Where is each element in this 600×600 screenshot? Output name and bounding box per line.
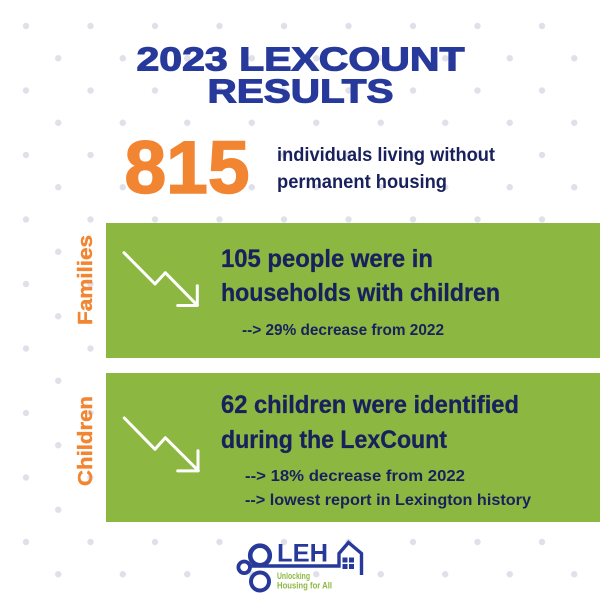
logo tagline: Unlocking <box>277 571 310 581</box>
icon: downward trend arrow <box>124 418 198 471</box>
logo tagline <box>277 571 332 591</box>
summary text: individuals living without <box>277 145 496 166</box>
children heading: during the LexCount <box>221 427 447 454</box>
title <box>136 40 464 110</box>
logo tagline: Housing for All <box>277 581 332 591</box>
children side label: Children <box>75 396 97 486</box>
families change note: --> 29% decrease from 2022 <box>242 322 444 339</box>
children change notes <box>245 468 531 509</box>
families side label: Families <box>75 235 97 325</box>
families heading <box>221 246 500 307</box>
children heading: 62 children were identified <box>221 392 519 419</box>
children change notes: --> 18% decrease from 2022 <box>245 468 465 485</box>
icon: downward trend arrow <box>124 253 197 306</box>
title: 2023 LEXCOUNT <box>136 40 464 78</box>
big number: 815: 815 <box>124 126 250 209</box>
families heading: households with children <box>221 280 500 307</box>
panel: families <box>106 223 600 358</box>
children change notes: --> lowest report in Lexington history <box>245 492 531 509</box>
logo wordmark: LEH <box>277 540 328 568</box>
families heading: 105 people were in <box>221 246 433 273</box>
logo: LEH key and house <box>234 538 366 594</box>
panel: children <box>106 373 600 522</box>
children heading <box>221 392 519 454</box>
icon: house window <box>342 558 354 569</box>
summary text: permanent housing <box>277 172 447 193</box>
icon: key and house <box>238 542 362 590</box>
title: RESULTS <box>208 72 394 110</box>
summary text <box>277 145 496 193</box>
